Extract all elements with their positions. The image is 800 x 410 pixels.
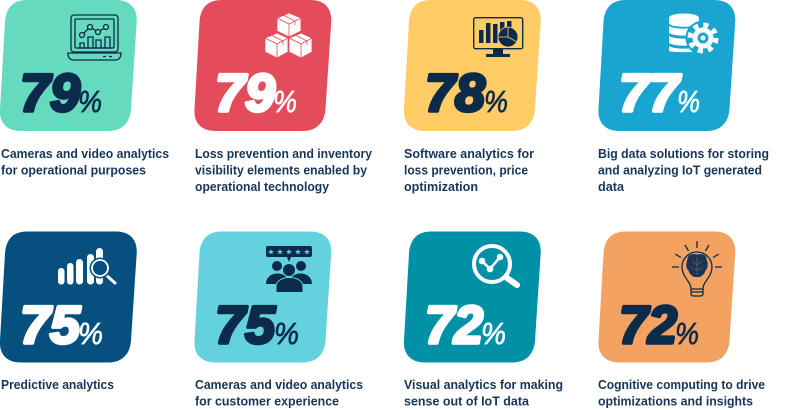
text: cognitive computing: Cognitive computing to drive — [598, 378, 765, 392]
percentage value: 75 — [20, 296, 82, 355]
text: cameras operational: for operational purposes — [1, 164, 146, 178]
icon: light bulb with brain — [672, 241, 722, 296]
text: customer experience — [195, 378, 363, 408]
card background — [0, 232, 137, 362]
panel: big data 77% — [598, 0, 735, 131]
icon: rating and people: ★ — [303, 248, 311, 256]
text: software analytics: Software analytics for — [404, 147, 534, 161]
icon: rating and people: ★ — [294, 248, 302, 256]
panel: loss prevention 79% — [194, 0, 331, 131]
text: cognitive computing — [598, 378, 765, 408]
card background — [598, 0, 735, 131]
panel: visual analytics 72% — [404, 232, 541, 362]
panel: cognitive computing 72% — [598, 232, 735, 362]
icon: rating and people — [266, 246, 312, 292]
text: customer experience: for customer experience — [195, 394, 339, 408]
percentage value: 72 — [425, 296, 483, 355]
percentage value: 79 — [20, 64, 81, 123]
icon: monitor with charts — [474, 18, 523, 57]
icon: magnifier with nodes — [474, 246, 517, 285]
icon: bars and magnifier — [58, 248, 115, 284]
percentage value: % — [273, 84, 297, 119]
percentage value: 78 — [425, 64, 486, 123]
icon: stacked boxes — [265, 13, 312, 58]
text: big data — [598, 147, 769, 194]
text: big data: and analyzing IoT generated — [598, 164, 762, 178]
percentage value: 77 — [619, 64, 682, 123]
icon: laptop chart — [68, 15, 121, 60]
text: visual analytics: Visual analytics for making — [404, 378, 563, 392]
text: loss prevention: operational technology — [195, 180, 329, 194]
panel: predictive analytics 75% — [0, 232, 137, 362]
text: software analytics — [404, 147, 534, 194]
percentage value: 79 — [215, 64, 276, 123]
percentage value: % — [484, 84, 508, 119]
text: software analytics: optimization — [404, 180, 478, 194]
percentage value: % — [274, 316, 299, 351]
text: cameras operational — [1, 147, 169, 178]
icon: rating and people: ★ — [285, 248, 293, 256]
text: cameras operational: Cameras and video analytics — [1, 147, 169, 161]
text: software analytics: loss prevention, price — [404, 164, 528, 178]
percentage value: % — [78, 316, 103, 351]
card background — [404, 232, 541, 362]
percentage value: % — [481, 316, 506, 351]
text: cognitive computing: optimizations and insights — [598, 394, 753, 408]
panel: software analytics 78% — [404, 0, 541, 131]
text: visual analytics: sense out of IoT data — [404, 394, 530, 408]
text: loss prevention: visibility elements enabled by — [195, 164, 367, 178]
percentage value: % — [78, 84, 102, 119]
percentage value: % — [675, 316, 699, 351]
card background — [194, 0, 331, 131]
card background — [194, 232, 331, 362]
percentage value: 72 — [619, 296, 677, 355]
percentage value: 75 — [215, 296, 277, 355]
icon: rating and people: ★ — [267, 248, 275, 256]
text: loss prevention — [195, 147, 372, 194]
text: big data: data — [598, 180, 625, 194]
panel: customer experience 75% — [194, 232, 331, 362]
panel: cameras operational 79% — [0, 0, 137, 131]
icon: database and gear — [669, 14, 720, 56]
icon: rating and people: ★ — [276, 248, 284, 256]
text: visual analytics — [404, 378, 563, 408]
card background — [598, 232, 735, 362]
text: big data: Big data solutions for storing — [598, 147, 769, 161]
text: predictive analytics: Predictive analytics — [1, 378, 114, 392]
text: customer experience: Cameras and video analytics — [195, 378, 363, 392]
text: loss prevention: Loss prevention and inventory — [195, 147, 372, 161]
percentage value: % — [677, 84, 700, 119]
card background — [404, 0, 541, 131]
card background — [0, 0, 137, 131]
